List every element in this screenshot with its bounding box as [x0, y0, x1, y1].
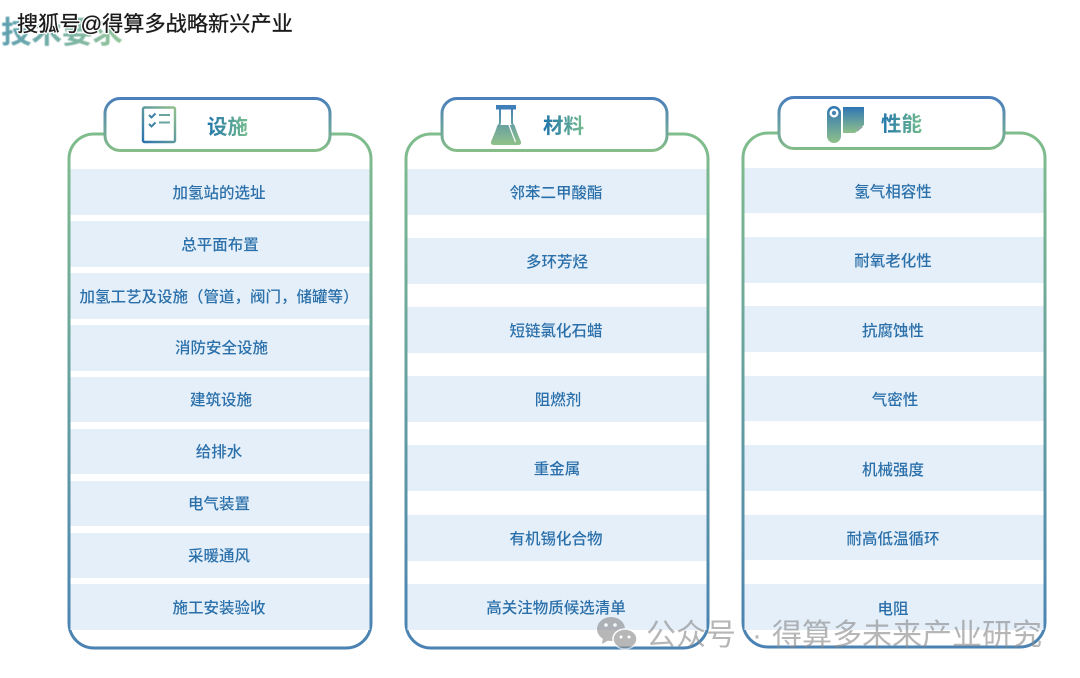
list rows: performance: 气密性 [872, 390, 918, 409]
list rows: materials: 重金属 [534, 459, 580, 478]
title: 技术要求 [1, 16, 123, 50]
icon: flask [491, 105, 521, 144]
icon: material roll and sheet [827, 106, 864, 143]
panel: materials [406, 98, 708, 648]
panel frame: materials [406, 134, 708, 648]
heading: materials: 材料 [543, 115, 584, 138]
list rows: performance: 耐高低温循环 [846, 530, 940, 548]
list rows: facilities: 电气装置 [188, 495, 250, 513]
list rows: facilities: 给排水 [196, 443, 243, 461]
list rows: materials [408, 169, 706, 630]
list rows: performance: 耐氧老化性 [854, 252, 932, 270]
panel: facilities [69, 98, 371, 648]
source watermark: top left: 搜狐号@得算多战略新兴产业 [17, 12, 293, 36]
list rows: facilities: 施工安装验收 [172, 599, 266, 617]
list rows: materials: 阻燃剂 [535, 391, 581, 409]
list rows: materials: 多环芳烃 [526, 253, 588, 271]
list rows: facilities: 采暖通风 [188, 547, 250, 565]
header tab: facilities [105, 98, 330, 150]
source watermark: top left: 搜狐号@得算多战略新兴产业 [17, 12, 293, 36]
list rows: materials: 有机锡化合物 [509, 530, 603, 548]
list rows: facilities: 加氢工艺及设施（管道，阀门，储罐等） [79, 287, 359, 306]
panel frame: performance [743, 133, 1045, 647]
list rows: facilities: 消防安全设施 [175, 338, 268, 357]
list rows: facilities: 加氢站的选址 [172, 183, 266, 202]
list rows: materials: 短链氯化石蜡 [509, 322, 603, 340]
list rows: performance: 氢气相容性 [854, 182, 932, 201]
list rows: performance [744, 168, 1044, 630]
icon: wechat [597, 617, 637, 649]
heading: performance: 性能 [881, 113, 922, 136]
list rows: materials: 邻苯二甲酸酯 [509, 184, 603, 202]
list rows: facilities [70, 169, 370, 630]
panel frame: facilities [69, 134, 371, 648]
header tab: performance [779, 98, 1004, 148]
watermark text: 得算多未来产业研究 [772, 619, 1042, 652]
list rows: facilities: 总平面布置 [181, 236, 259, 254]
list rows: performance: 抗腐蚀性 [862, 321, 924, 340]
watermark text: · [752, 619, 762, 652]
wechat watermark [597, 617, 1042, 652]
icon: checklist [143, 108, 175, 142]
list rows: facilities: 建筑设施 [190, 391, 252, 409]
panel: performance [743, 98, 1045, 647]
list rows: materials: 高关注物质候选清单 [486, 599, 626, 617]
heading: facilities: 设施 [207, 116, 248, 139]
header tab: materials [442, 98, 667, 150]
list rows: performance: 电阻 [877, 600, 909, 618]
list rows: performance: 机械强度 [862, 461, 924, 479]
watermark text: 公众号 [646, 619, 736, 652]
